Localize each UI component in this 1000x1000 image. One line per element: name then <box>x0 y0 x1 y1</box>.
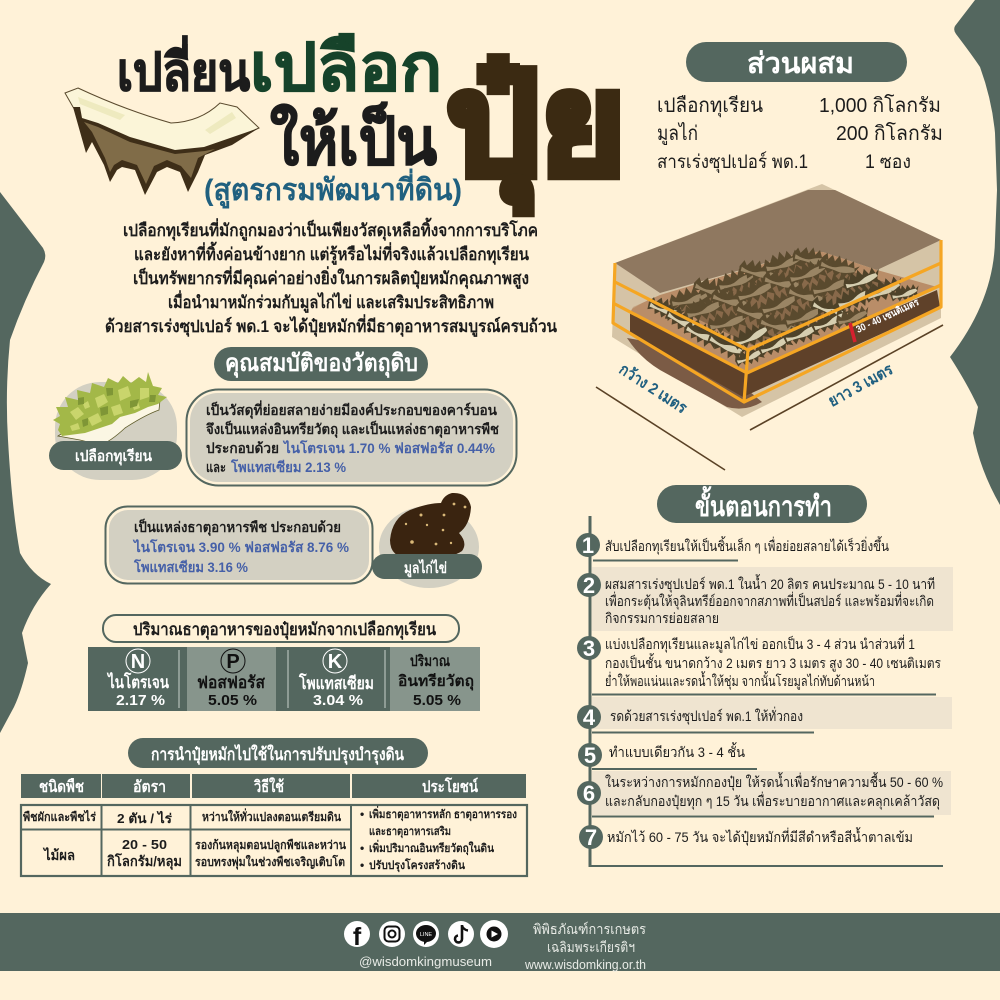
panel: ingredients: มูลไก่ <box>657 122 698 146</box>
nutrient: nitrogen: N <box>131 651 145 673</box>
table body: • <box>360 807 364 821</box>
panel: ingredients <box>657 42 943 174</box>
panel: chicken manure properties: เป็นแหล่งธาตุอาหารพืช ประกอบด้วย <box>134 518 341 536</box>
dimension: width <box>596 360 725 470</box>
nutrient: phosphorus: 5.05 % <box>208 692 257 709</box>
table body <box>21 805 527 876</box>
table header: อัตรา <box>133 778 166 796</box>
table body: รอบทรงพุ่มในช่วงพืชเจริญเติบโต <box>195 854 345 870</box>
step 6: 6 <box>583 781 595 806</box>
panel: durian peel properties <box>186 390 516 486</box>
nutrient: organic matter: อินทรียวัตถุ <box>398 672 474 691</box>
step 6 <box>577 772 943 810</box>
table body: • <box>360 858 364 872</box>
step 7 <box>579 825 913 850</box>
panel: durian peel properties: โพแทสเซียม 2.13 % <box>230 458 347 475</box>
label: durian peel <box>49 441 182 470</box>
heading: usage <box>128 738 428 768</box>
icon: durian shell cross-section <box>65 88 259 195</box>
table body: เพิ่มปริมาณอินทรียวัตถุในดิน <box>369 839 494 856</box>
step 4: 4 <box>583 705 596 730</box>
table header: วิธีใช้ <box>253 777 284 796</box>
panel: ingredients: 200 กิโลกรัม <box>836 122 943 145</box>
icon: line <box>413 921 439 947</box>
panel: durian peel properties: ไนโตรเจน 1.70 % ฟอสฟอรัส 0.44% <box>282 439 496 456</box>
table header <box>21 774 526 798</box>
table body: • <box>360 841 364 855</box>
step 6: และกลับกองปุ๋ยทุก ๆ 15 วัน เพื่อระบายอากาศและคลุกเคล้าวัสดุ <box>605 792 940 810</box>
diagram: compost pile box <box>596 184 943 470</box>
table body: พืชผักและพืชไร่ <box>23 809 97 824</box>
step 3: กองเป็นชั้น ขนาดกว้าง 2 เมตร ยาว 3 เมตร สูง 30 - 40 เซนติเมตร <box>605 653 941 672</box>
title: เปลือก <box>250 30 442 104</box>
dimension: length <box>750 325 943 430</box>
table body: ไม้ผล <box>42 846 75 863</box>
panel: durian peel properties: จึงเป็นแหล่งอินทรียวัตถุ และเป็นแหล่งธาตุอาหารพืช <box>205 420 499 438</box>
subtitle: (สูตรกรมพัฒนาที่ดิน) <box>204 168 462 209</box>
table body: 20 - 50 <box>122 837 167 852</box>
intro paragraph: เป็นทรัพยากรที่มีคุณค่าอย่างยิ่งในการผลิตปุ๋ยหมักคุณภาพสูง <box>133 266 529 290</box>
orange frame <box>613 240 941 402</box>
panel: chicken manure properties: ไนโตรเจน 3.90 % ฟอสฟอรัส 8.76 % <box>132 538 350 555</box>
dimension: width: กว้าง 2 เมตร <box>616 360 690 417</box>
museum name <box>524 921 646 972</box>
step 1 <box>576 533 889 558</box>
heading: process steps <box>657 485 867 523</box>
title: เปลี่ยน <box>117 36 250 102</box>
icon: instagram <box>379 921 405 947</box>
step 3: 3 <box>583 636 595 661</box>
panel: chicken manure properties <box>106 506 372 584</box>
nutrient: phosphorus: P <box>226 651 240 673</box>
nutrient: organic matter: 5.05 % <box>413 692 461 709</box>
intro paragraph: และยังหาที่ทิ้งค่อนข้างยาก แต่รู้หรือไม่ที่จริงแล้วเปลือกทุเรียน <box>134 241 529 266</box>
step 2: กิจกรรมการย่อยสลาย <box>605 610 719 626</box>
nutrient: phosphorus <box>197 649 266 709</box>
label: chicken manure: มูลไก่ไข่ <box>404 558 447 578</box>
footer band <box>0 913 1000 972</box>
pile of durian shells <box>645 244 922 370</box>
table body: รองก้นหลุมตอนปลูกพืชและหว่าน <box>195 838 347 853</box>
step 7: หมักไว้ 60 - 75 วัน จะได้ปุ๋ยหมักที่มีสีดำหรือสีน้ำตาลเข้ม <box>607 827 913 846</box>
nutrient: nitrogen <box>106 649 169 709</box>
step 3 <box>577 635 941 690</box>
dimension: height marker: 30 - 40 เซนติเมตร <box>854 296 921 336</box>
step 7: 7 <box>585 825 597 850</box>
panel: durian peel properties: และ <box>206 459 226 475</box>
icon: line: LINE <box>420 932 432 938</box>
title: ให้เป็น <box>270 101 437 178</box>
social handle: @wisdomkingmuseum <box>359 954 492 969</box>
usage table <box>21 774 527 876</box>
step 5 <box>578 742 745 768</box>
nutrient: potassium: โพแทสเซียม <box>298 673 374 693</box>
icon: durian peel <box>53 372 177 480</box>
heading: nutrient content <box>103 615 459 642</box>
step 5: ทำแบบเดียวกัน 3 - 4 ชั้น <box>609 742 745 760</box>
panel: durian peel properties: ประกอบด้วย <box>206 440 279 456</box>
panel: ingredients: 1 ซอง <box>865 152 911 173</box>
nutrient: organic matter: ปริมาณ <box>410 652 450 670</box>
table header: ประโยชน์ <box>422 776 478 796</box>
title: ปุ๋ย <box>446 46 626 214</box>
icon: youtube <box>480 920 508 948</box>
background blob: left <box>0 192 51 733</box>
table body: 2 ตัน / ไร่ <box>117 810 172 826</box>
icon: facebook: f <box>353 923 362 951</box>
step 2: เพื่อกระตุ้นให้จุลินทรีย์ออกจากสภาพที่เป็นสปอร์ และพร้อมที่จะเกิด <box>605 592 934 610</box>
panel: ingredients: สารเร่งซุปเปอร์ พด.1 <box>657 151 808 174</box>
nutrient: potassium: K <box>328 651 343 673</box>
table body: เพิ่มธาตุอาหารหลัก ธาตุอาหารรอง <box>369 805 517 822</box>
nutrient: nitrogen: ไนโตรเจน <box>106 672 169 692</box>
icon: facebook <box>344 921 370 951</box>
dimension: height marker <box>850 296 921 342</box>
heading: nutrient content: ปริมาณธาตุอาหารของปุ๋ยหมักจากเปลือกทุเรียน <box>133 619 436 640</box>
table body: ปรับปรุงโครงสร้างดิน <box>369 857 465 873</box>
table header: ชนิดพืช <box>39 778 84 796</box>
nutrient: organic matter <box>398 652 474 709</box>
heading: process steps: ขั้นตอนการทำ <box>695 485 832 522</box>
museum name: พิพิธภัณฑ์การเกษตร <box>533 921 646 937</box>
step 2 <box>577 573 935 626</box>
nutrient: potassium <box>298 649 374 709</box>
step 2: ผสมสารเร่งซุปเปอร์ พด.1 ในน้ำ 20 ลิตร คนประมาณ 5 - 10 นาที <box>605 574 935 593</box>
panel: ingredients: เปลือกทุเรียน <box>657 95 763 118</box>
intro paragraph <box>105 217 557 338</box>
panel: ingredients: 1,000 กิโลกรัม <box>819 94 941 117</box>
table body: และธาตุอาหารเสริม <box>369 825 451 839</box>
intro paragraph: เปลือกทุเรียนที่มักถูกมองว่าเป็นเพียงวัสดุเหลือทิ้งจากการบริโภค <box>123 217 538 242</box>
step 6: ในระหว่างการหมักกองปุ๋ย ให้รดน้ำเพื่อรักษาความชื้น 50 - 60 % <box>605 772 943 791</box>
panel: process steps <box>576 516 953 867</box>
step 4 <box>577 705 803 730</box>
title <box>117 30 626 214</box>
label: durian peel: เปลือกทุเรียน <box>75 448 153 466</box>
icon: chicken manure <box>379 493 479 588</box>
nutrient: phosphorus: ฟอสฟอรัส <box>197 673 266 692</box>
intro paragraph: เมื่อนำมาหมักร่วมกับมูลไก่ไข่ และเสริมประสิทธิภาพ <box>168 290 494 314</box>
step 3: แบ่งเปลือกทุเรียนและมูลไก่ไข่ ออกเป็น 3 - 4 ส่วน นำส่วนที่ 1 <box>605 635 915 653</box>
label: chicken manure <box>372 554 482 579</box>
dimension: length: ยาว 3 เมตร <box>826 361 896 410</box>
museum name: เฉลิมพระเกียรติฯ <box>547 939 635 955</box>
museum name: www.wisdomking.or.th <box>524 958 646 972</box>
panel: ingredients: ส่วนผสม <box>747 48 854 80</box>
step 1: 1 <box>582 533 594 558</box>
step 4: รดด้วยสารเร่งซุปเปอร์ พด.1 ให้ทั่วกอง <box>610 707 803 725</box>
intro paragraph: ด้วยสารเร่งซุปเปอร์ พด.1 จะได้ปุ๋ยหมักที่มีธาตุอาหารสมบูรณ์ครบถ้วน <box>105 314 557 338</box>
background blob: right <box>950 0 1000 505</box>
step 1: สับเปลือกทุเรียนให้เป็นชิ้นเล็ก ๆ เพื่อย่อยสลายได้เร็วยิ่งขึ้น <box>605 536 889 555</box>
panel: chicken manure properties: โพแทสเซียม 3.16 % <box>133 558 249 575</box>
heading: raw material properties: คุณสมบัติของวัตถุดิบ <box>225 350 418 379</box>
step 5: 5 <box>584 743 596 768</box>
table body: กิโลกรัม/หลุม <box>107 852 182 870</box>
step 3: ย่ำให้พอแน่นและรดน้ำให้ชุ่ม จากนั้นโรยมูลไก่ทับด้านหน้า <box>605 671 875 690</box>
heading: usage: การนำปุ๋ยหมักไปใช้ในการปรับปรุงบำรุงดิน <box>151 744 404 765</box>
panel: durian peel properties: เป็นวัสดุที่ย่อยสลายง่ายมีองค์ประกอบของคาร์บอน <box>206 400 497 419</box>
table body: หว่านให้ทั่วแปลงตอนเตรียมดิน <box>202 808 342 824</box>
nutrient: nitrogen: 2.17 % <box>116 692 165 709</box>
step 2: 2 <box>583 573 595 598</box>
icon: tiktok <box>448 921 474 947</box>
nutrient table <box>88 647 480 711</box>
nutrient: potassium: 3.04 % <box>313 692 363 709</box>
